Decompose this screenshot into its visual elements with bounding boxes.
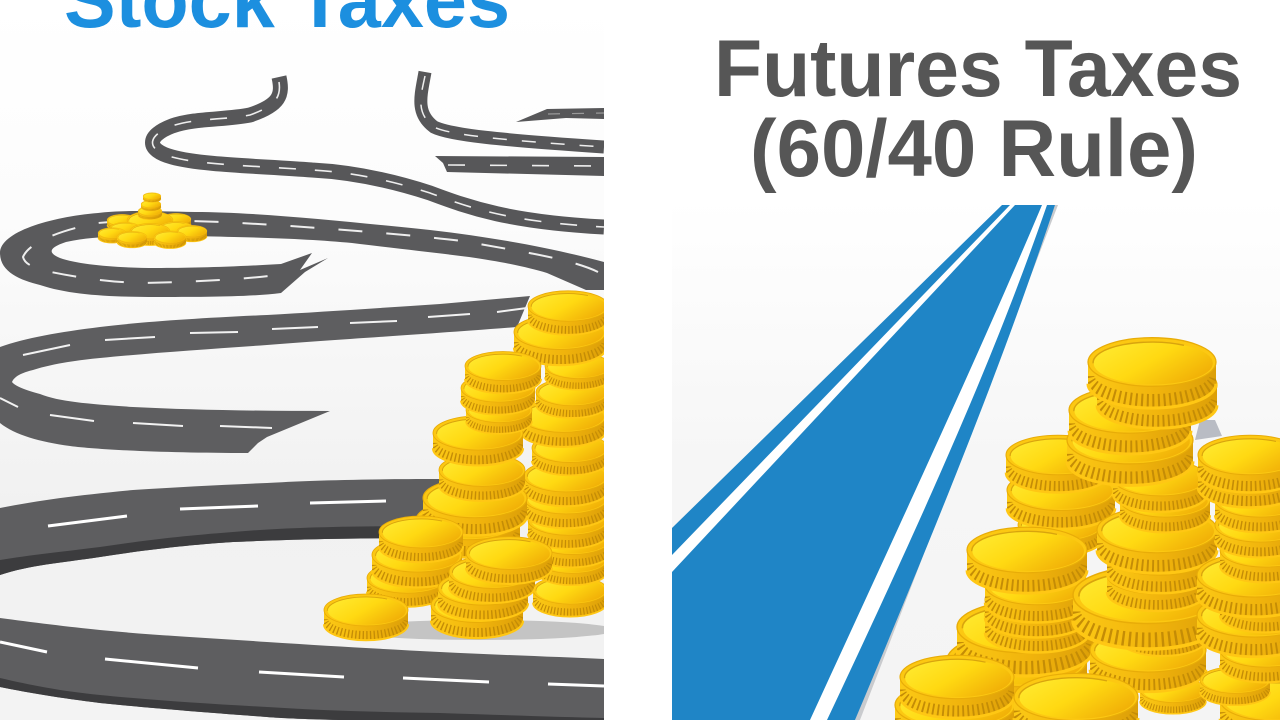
shadow: futures coin stack [1195, 420, 1222, 440]
heading: futures taxes: Futures Taxes [714, 24, 1242, 114]
road: short lower fragment [435, 156, 604, 176]
coin column: middle left [947, 527, 1093, 710]
road: top winding [152, 77, 604, 227]
road: lower wide curve [0, 479, 440, 575]
coin column: middle tall [416, 352, 541, 557]
coin column: left low [367, 516, 463, 607]
heading: futures taxes [714, 24, 1242, 194]
panel: futures taxes background [672, 200, 1280, 720]
coin column: bottom left [895, 655, 1015, 720]
coin column: centre [1067, 338, 1223, 714]
coin column: right [1197, 435, 1280, 720]
coin column: front [431, 537, 552, 638]
coin: front single [1014, 673, 1138, 720]
lane line: right [810, 205, 1047, 720]
road shadow [855, 205, 1058, 720]
fast blue road [672, 205, 1058, 720]
coin column: right [514, 291, 611, 617]
small coin pile [98, 193, 207, 249]
road: coin loop [0, 211, 604, 297]
road: short upper fragment [516, 108, 604, 122]
road: bottom wide curve [0, 618, 604, 720]
shadow: stock coin stack [392, 620, 604, 640]
heading: futures taxes: (60/40 Rule) [750, 104, 1198, 194]
panel: stock taxes background [0, 0, 604, 720]
road: middle s-curve [0, 296, 530, 453]
road: top right curve [421, 72, 604, 147]
large coin stack: futures side [895, 338, 1280, 720]
coin column: back left [1006, 435, 1115, 555]
coin: flat single [324, 594, 408, 640]
lane line: left [672, 205, 1015, 572]
road surface [672, 205, 1055, 720]
winding roads and stock coins [0, 72, 615, 720]
